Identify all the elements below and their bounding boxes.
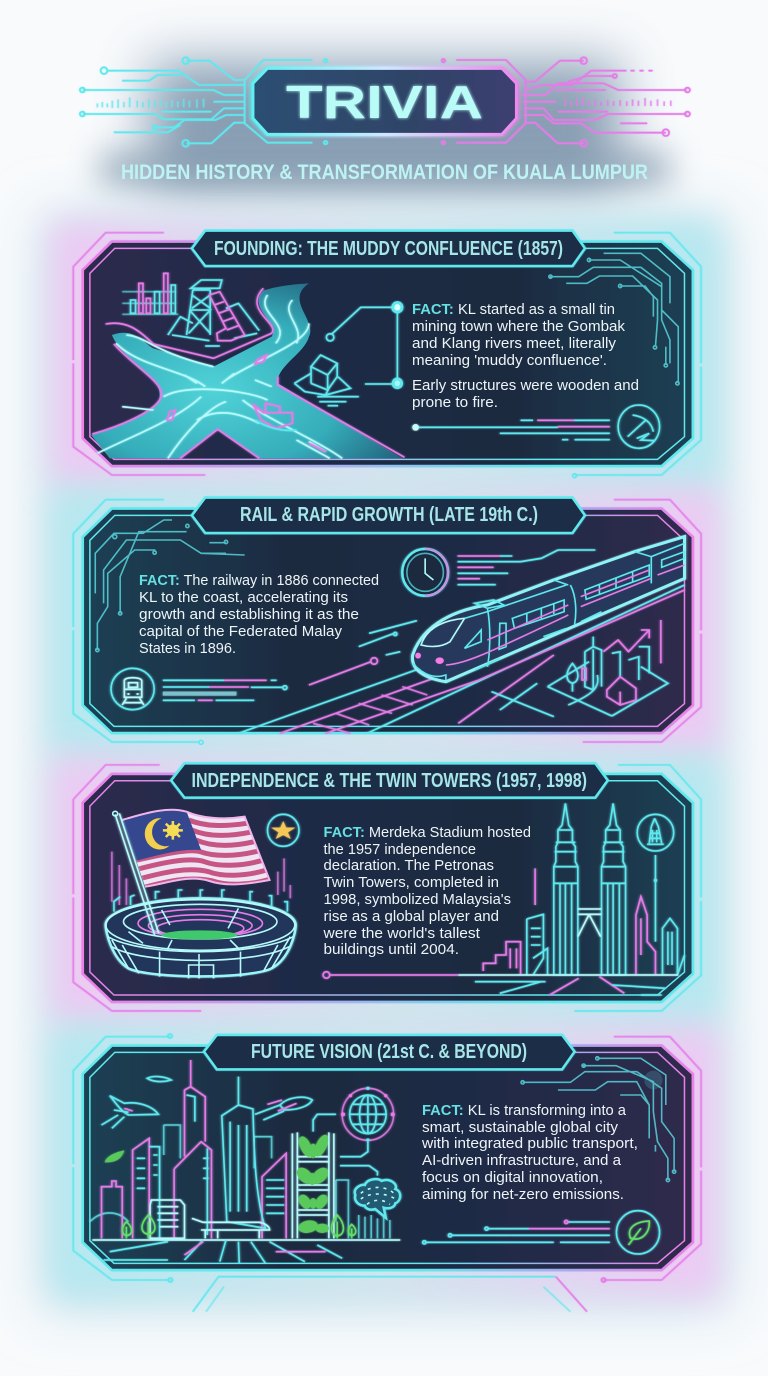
illustration: stadium: [106, 852, 296, 978]
icon: pickaxe and river: [618, 405, 660, 448]
section heading: FOUNDING: THE MUDDY CONFLUENCE (1857): [214, 238, 563, 260]
panel frame: [73, 1037, 701, 1280]
section heading: RAIL & RAPID GROWTH (LATE 19th C.): [240, 504, 538, 526]
fact text: [421, 1103, 638, 1203]
fact text: FACT: KL is transforming into a: [422, 1103, 627, 1119]
icon: train badge and data lines: [111, 668, 287, 710]
title circuit traces: [80, 57, 690, 147]
icon: hut, boat: [167, 355, 359, 452]
section heading: INDEPENDENCE & THE TWIN TOWERS (1957, 1998): [192, 770, 587, 792]
fact text: [322, 825, 531, 958]
title block: [80, 57, 690, 184]
fact text: capital of the Federated Malay: [139, 624, 343, 640]
panel: future vision: [73, 1034, 701, 1312]
section heading: [192, 498, 585, 533]
panel: independence: [73, 763, 701, 1011]
fact text: smart, sustainable global city: [422, 1120, 619, 1136]
icon: mine tower and chart: [122, 273, 259, 346]
illustration: Petronas Twin Towers skyline: [323, 803, 684, 995]
icon: leaf badge: [616, 1211, 660, 1254]
illustration: rail track: [238, 585, 684, 733]
illustration: train: [413, 537, 684, 682]
icon: star badge: [267, 814, 299, 846]
fact text: Early structures were wooden and: [412, 378, 639, 394]
data lines: [412, 420, 610, 440]
panel frame: [73, 500, 701, 744]
subtitle: HIDDEN HISTORY & TRANSFORMATION OF KUALA LUMPUR: [121, 161, 648, 184]
illustration: river confluence: [91, 283, 404, 458]
panel frame: [73, 233, 701, 478]
icon: city growth chart: [548, 620, 668, 716]
base trapezoid: [168, 1034, 606, 1312]
fact text: FACT: KL started as a small tin: [412, 302, 615, 318]
panel: rail: [73, 498, 701, 744]
fact text: FACT: Merdeka Stadium hosted: [324, 825, 531, 841]
section heading: [192, 231, 585, 266]
fact text: declaration. The Petronas: [324, 858, 494, 874]
section heading: [204, 1035, 575, 1069]
fact text: the 1957 independence: [324, 842, 476, 858]
fact text: meaning 'muddy confluence'.: [412, 353, 607, 369]
icon: tower badge: [637, 814, 674, 851]
section heading: FUTURE VISION (21st C. & BEYOND): [251, 1041, 527, 1063]
connector lines: [326, 303, 402, 388]
fact text: focus on digital innovation,: [422, 1170, 603, 1186]
icon: flying vehicles: [101, 1077, 312, 1128]
icon: clock: [402, 549, 595, 596]
fact text: States in 1896.: [139, 641, 236, 657]
fact text: [139, 573, 379, 657]
fact text: FACT: The railway in 1886 connected: [139, 573, 379, 589]
fact text: growth and establishing it as the: [139, 607, 359, 623]
fact text: with integrated public transport,: [421, 1136, 638, 1152]
illustration: future skyline: [90, 1060, 400, 1263]
panel: founding: [73, 231, 701, 478]
icon: brain: [355, 1179, 400, 1218]
fact text: rise as a global player and: [324, 909, 499, 925]
fact text: Twin Towers, completed in: [324, 875, 499, 891]
panel frame: [73, 765, 701, 1011]
fact text: buildings until 2004.: [324, 942, 459, 958]
circuit traces: [95, 520, 245, 652]
illustration: green wall: [292, 1132, 334, 1238]
circuit traces: [521, 1057, 676, 1182]
icon: trees and leaf: [105, 1150, 356, 1238]
fact text: mining town where the Gombak: [412, 319, 626, 335]
title plate: [253, 68, 516, 134]
fact text: 1998, symbolized Malaysia's: [324, 892, 511, 908]
illustration: Malaysian flag: [113, 805, 276, 935]
icon: globe: [313, 1087, 395, 1176]
fact text: KL to the coast, accelerating its: [139, 590, 348, 606]
data lines: [423, 1220, 610, 1244]
fact text: [412, 302, 639, 411]
title text: TRIVIA: [286, 76, 483, 128]
circuit traces: [549, 253, 679, 385]
fact text: aiming for net-zero emissions.: [422, 1187, 624, 1203]
fact text: were the world's tallest: [322, 926, 480, 942]
fact text: AI-driven infrastructure, and a: [422, 1153, 622, 1169]
fact text: prone to fire.: [412, 395, 498, 411]
fact text: and Klang rivers meet, literally: [412, 336, 617, 352]
section heading: [171, 763, 608, 798]
